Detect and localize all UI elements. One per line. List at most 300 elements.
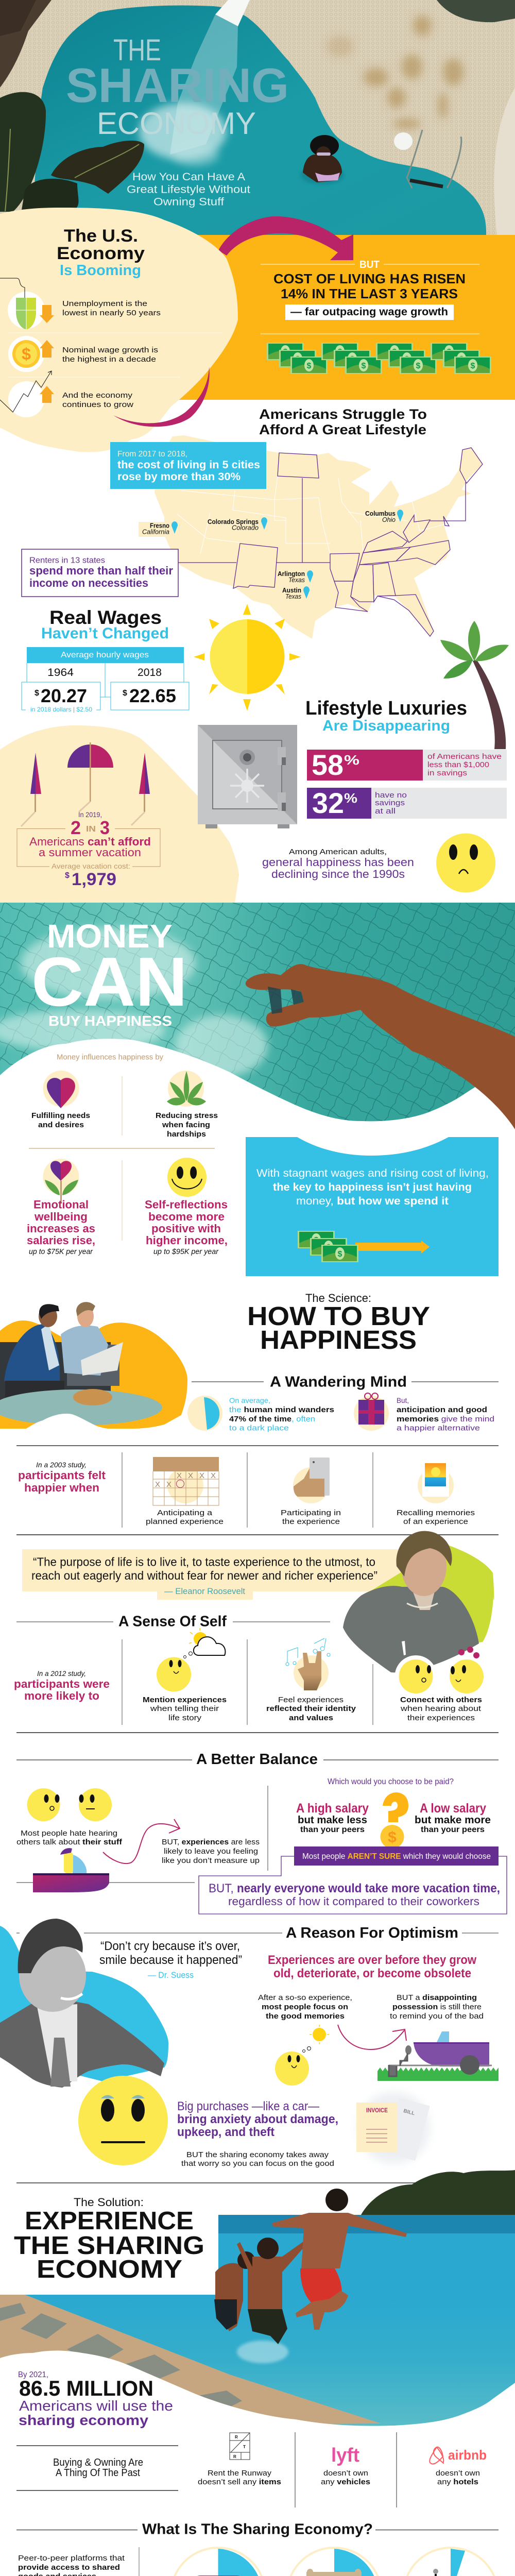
stat bar: 58 percent: %	[344, 752, 359, 768]
section: a reason for optimism: A Reason For Optimism	[286, 1925, 458, 1941]
icon: two faces	[27, 1788, 112, 1821]
icon: bed	[306, 2569, 362, 2576]
text: three traits: when telling their	[150, 1704, 219, 1713]
text: experiences: likely to leave you feeling	[164, 1847, 258, 1856]
text: three stages: Participating in	[281, 1509, 341, 1517]
foliage	[0, 92, 144, 216]
arrow	[338, 2025, 406, 2049]
photo: kids jumping in pool	[0, 2170, 515, 2432]
text: disappointing possession: BUT a disappointing	[397, 1993, 477, 2002]
callout: cost of living in 5 cities	[110, 442, 266, 489]
icon: calendar: X	[188, 1471, 193, 1480]
icon: question mark coin	[380, 1792, 408, 1849]
text: so-so experience	[258, 1993, 352, 2021]
text: so-so experience: After a so-so experience,	[258, 1993, 352, 2002]
stat bar: 32 percent: have no	[375, 791, 407, 800]
text: needs: Fulfilling needs	[31, 1111, 90, 1120]
wages table: Average hourly wages	[61, 651, 149, 659]
quote: Eleanor Roosevelt: reach out eagerly and without fear for newer and richer experience”	[31, 1569, 377, 1582]
logo: Rent the Runway: R	[235, 2435, 238, 2439]
text: three traits: reflected their identity	[266, 1704, 356, 1713]
icon: thinking face	[157, 1628, 225, 1692]
logo row: sharing companies	[198, 2432, 487, 2507]
logo: Airbnb: doesn’t own	[436, 2469, 480, 2478]
cost heading	[261, 259, 479, 334]
logo: Lyft: doesn’t own	[323, 2469, 368, 2478]
callout: aren't sure: Most people AREN’T SURE which they would choose	[302, 1852, 491, 1861]
heading: money can buy happiness	[31, 918, 187, 1029]
text: experiences: BUT, experiences are less	[162, 1838, 260, 1846]
stat: 86.5 million	[18, 2370, 173, 2428]
text: big purchases	[177, 2099, 338, 2168]
text: mind wanders: 47% of the time , often	[229, 1415, 315, 1423]
text: anticipation: anticipation and good	[397, 1405, 487, 1414]
subtitle: How You Can Have A	[132, 171, 245, 183]
icon: phone in hand	[293, 1458, 330, 1503]
heading: how to buy happiness: HOW TO BUY	[247, 1301, 430, 1331]
icon: umbrellas	[21, 742, 150, 826]
panel: the key to happiness: the key to happiness isn’t just having	[273, 1181, 472, 1193]
logo: Lyft	[321, 2445, 370, 2486]
quote: Dr. Seuss	[99, 1939, 242, 1980]
stat: 2 in 3: a summer vacation	[39, 846, 141, 859]
section: what is the sharing economy	[12, 2521, 499, 2576]
photo: pool water and hand	[0, 903, 515, 1141]
kids	[214, 2189, 407, 2363]
text: general happiness: declining since the 1990s	[271, 868, 405, 880]
text: hate hearing: Most people hate hearing	[21, 1829, 117, 1838]
text: emotional wellbeing: salaries rise,	[27, 1234, 95, 1247]
text: experiences: like you don’t measure up	[162, 1856, 260, 1865]
logo: Rent the Runway	[198, 2433, 281, 2486]
icon: smiley	[167, 1158, 207, 1197]
panel: the key to happiness: With stagnant wages and rising cost of living,	[256, 1167, 489, 1179]
heading: Americans struggle: Afford A Great Lifestyle	[259, 422, 426, 437]
icon: scooter	[431, 2569, 474, 2576]
logo: Rent the Runway: Rent the Runway	[208, 2469, 272, 2478]
text: self-reflections: higher income,	[146, 1234, 228, 1247]
callout: vacation time: regardless of how it compared to their coworkers	[228, 1895, 479, 1908]
heading: real wages: Real Wages	[49, 607, 162, 628]
text: emotional wellbeing: wellbeing	[34, 1210, 88, 1223]
text: three traits: Connect with others	[400, 1696, 482, 1704]
stat: 2 in 3	[17, 810, 160, 889]
text: anticipation	[397, 1396, 494, 1432]
section: what is the sharing economy: What Is The Sharing Economy?	[142, 2521, 373, 2538]
text: emotional wellbeing	[27, 1198, 95, 1256]
text: high salary: but make less	[298, 1815, 367, 1826]
city pins	[142, 510, 403, 600]
heading: money can buy happiness: CAN	[31, 943, 187, 1021]
wages table: 1964	[47, 667, 74, 679]
text: mind wanders: On average,	[229, 1396, 270, 1404]
text: mind wanders: to a dark place	[229, 1424, 289, 1432]
logo: Airbnb: any hotels	[437, 2478, 478, 2486]
text: big purchases: upkeep, and theft	[177, 2125, 274, 2139]
icon: two faces	[394, 1641, 488, 1698]
panel: the key to happiness: money, but how we spend it	[296, 1195, 449, 1207]
city pins: Fresno	[150, 521, 169, 530]
icon: heart	[43, 1071, 79, 1108]
panel: money influences	[27, 1053, 228, 1256]
text: three stages: Recalling memories	[397, 1509, 475, 1517]
section: a wandering mind	[187, 1374, 499, 1432]
city pins: Colorado Springs	[208, 518, 259, 526]
logo: Lyft: lyft	[331, 2445, 359, 2466]
text: self-reflections	[145, 1198, 228, 1256]
text: mind wanders: the human mind wanders	[229, 1405, 334, 1414]
stat bar: 32 percent: at all	[375, 807, 396, 816]
stat bar: 58 percent: of Americans have	[427, 752, 502, 761]
text: needs: hardships	[167, 1130, 206, 1139]
text: three traits: Mention experiences	[143, 1696, 227, 1704]
arm	[246, 964, 515, 1129]
callout: cost of living in 5 cities: the cost of living in 5 cities	[117, 459, 260, 471]
quote: Dr. Seuss: — Dr. Suess	[148, 1970, 194, 1980]
panel: 2003 study: happier when	[24, 1481, 99, 1494]
city pins: Texas	[285, 592, 301, 600]
text: disappointing possession: to remind you of the bad	[390, 2012, 484, 2021]
subtitle: Great Lifestyle Without	[127, 183, 250, 196]
panel: 2003 study	[18, 1452, 475, 1528]
icon: question mark coin: or	[392, 1802, 398, 1810]
text: self-reflections: positive with	[151, 1222, 221, 1235]
text: 2012 study: more likely to	[24, 1689, 99, 1702]
heading: how to buy happiness: The Science:	[305, 1292, 371, 1304]
text: general happiness	[262, 848, 414, 880]
text: three traits	[143, 1696, 482, 1722]
panel: money influences: Money influences happiness by	[57, 1053, 163, 1061]
text: needs: Reducing stress	[156, 1111, 218, 1120]
text: emotional wellbeing: up to $75K per year	[29, 1247, 93, 1256]
text: needs	[31, 1111, 218, 1139]
row: wage growth	[8, 336, 158, 372]
money icons	[267, 343, 491, 374]
stat: 2 in 3: 2	[71, 817, 81, 838]
text: high salary: A high salary	[296, 1801, 369, 1816]
text: disappointing possession: possession is still there	[392, 2003, 482, 2011]
heading: economy: Economy	[57, 244, 145, 263]
logo: Rent the Runway: T	[243, 2445, 246, 2449]
text: three stages: of an experience	[403, 1517, 468, 1526]
text: 2012 study	[14, 1669, 110, 1702]
heading: experience the sharing economy: EXPERIENCE	[25, 2207, 194, 2235]
callout: renters	[22, 549, 178, 597]
text: three stages: planned experience	[146, 1517, 224, 1526]
icon: palm tree	[440, 621, 509, 749]
row: wage growth: Nominal wage growth is	[62, 346, 158, 354]
hero photo: pool from above	[0, 0, 515, 235]
heading: Americans struggle: Americans Struggle To	[259, 406, 427, 422]
heading: real wages	[41, 607, 169, 642]
chart: lodging 9 percent	[287, 2548, 382, 2576]
heading: how to buy happiness	[247, 1292, 430, 1354]
text: general happiness: Among American adults,	[289, 848, 387, 856]
text: buying and owning: Buying & Owning Are	[53, 2457, 143, 2468]
text: big purchases: BUT the sharing economy takes away	[186, 2150, 329, 2159]
icon: calendar: X	[166, 1480, 171, 1489]
icon: music hand	[286, 1638, 330, 1690]
text: buying and owning	[16, 2446, 178, 2490]
city pins: Texas	[288, 576, 305, 584]
icon: calendar	[153, 1457, 219, 1505]
icon: safe	[198, 725, 297, 828]
title	[66, 33, 289, 141]
stat: 86.5 million: 86.5 MILLION	[19, 2376, 153, 2400]
logo: Airbnb	[430, 2447, 487, 2486]
quote: Eleanor Roosevelt: — Eleanor Roosevelt	[164, 1586, 245, 1596]
icon: calendar: X	[211, 1471, 216, 1480]
icon: calendar: X	[199, 1471, 204, 1480]
wages table: $	[35, 689, 39, 698]
icon: boat on trailer	[377, 2031, 499, 2081]
text: self-reflections: become more	[148, 1210, 225, 1223]
icon: gift	[354, 1393, 389, 1431]
city pins: California	[142, 528, 169, 536]
stat: 86.5 million: Americans will use the	[19, 2398, 173, 2414]
logo: Lyft: any vehicles	[321, 2478, 370, 2486]
heading: economy	[57, 226, 145, 279]
logo: Rent the Runway: doesn’t sell any items	[198, 2478, 281, 2486]
text: high salary: than your peers	[300, 1825, 365, 1834]
panel: 2003 study: In a 2003 study,	[36, 1461, 87, 1469]
text: three traits: and values	[289, 1714, 333, 1722]
photo: two men with laptop	[0, 1302, 187, 1443]
text: three stages: the experience	[282, 1517, 340, 1526]
callout: aren't sure	[294, 1846, 499, 1866]
stat: 2 in 3: $	[65, 871, 70, 880]
stat: 86.5 million: sharing economy	[19, 2412, 148, 2428]
heading: lifestyle luxuries: Are Disappearing	[322, 718, 450, 734]
callout: vacation time: BUT, nearly everyone would take more vacation time,	[209, 1882, 500, 1895]
text: self-reflections: Self-reflections	[145, 1198, 228, 1211]
text: anticipation: memories give the mind	[397, 1415, 494, 1423]
icon: pie 47 percent	[187, 1396, 222, 1431]
stat bar: 58 percent: less than $1,000	[427, 760, 489, 769]
stat: 2 in 3: 3	[100, 817, 110, 838]
wages table: 22.65	[129, 685, 176, 706]
callout: cost of living in 5 cities: rose by more than 30%	[117, 471, 241, 483]
icon: leaf	[167, 1071, 206, 1107]
subtitle: Owning Stuff	[153, 196, 224, 208]
quote: Dr. Seuss: smile because it happened”	[99, 1953, 242, 1967]
logo: Rent the Runway: R	[233, 2454, 236, 2459]
section: a sense of self: A Sense Of Self	[118, 1614, 227, 1630]
title: THE	[113, 33, 161, 67]
text: high salary	[296, 1801, 369, 1834]
text: general happiness: general happiness has been	[262, 856, 414, 869]
cost heading: BUT	[359, 259, 380, 270]
cost heading: 14% IN THE LAST 3 YEARS	[281, 286, 458, 301]
heading: real wages: Haven’t Changed	[41, 625, 169, 642]
icon: car	[191, 2575, 246, 2576]
text: anticipation: a happier alternative	[397, 1424, 480, 1432]
text: buying and owning: A Thing Of The Past	[56, 2467, 140, 2479]
stat: 2 in 3: In 2019,	[78, 810, 102, 819]
heading: economy: Is Booming	[60, 262, 141, 279]
icon: invoice and bill: BILL	[403, 2108, 415, 2116]
text: emotional wellbeing: Emotional	[33, 1198, 89, 1211]
wages table: $	[123, 689, 127, 698]
text: experiences over: Experiences are over before they grow	[268, 1953, 476, 1967]
section: a better balance	[16, 1751, 507, 1914]
city pins: Arlington	[278, 570, 305, 578]
text: needs: and desires	[38, 1121, 84, 1129]
text: anticipation: But,	[397, 1396, 409, 1404]
text: three stages	[146, 1509, 475, 1526]
city pins: Austin	[282, 586, 301, 594]
icon: invoice and bill	[356, 2092, 430, 2164]
text: emotional wellbeing: increases as	[27, 1222, 95, 1235]
text: 2012 study: In a 2012 study,	[37, 1669, 86, 1677]
icon: sun	[194, 604, 301, 711]
icon: flower	[43, 1159, 79, 1204]
text: so-so experience: the good memories	[266, 2012, 345, 2021]
city pins: Columbus	[365, 510, 396, 517]
quote: Eleanor Roosevelt	[22, 1549, 402, 1600]
stat: 2 in 3: IN	[86, 825, 96, 834]
heading: experience the sharing economy	[14, 2196, 204, 2283]
text: disappointing possession	[390, 1993, 484, 2021]
text: three traits: life story	[168, 1714, 202, 1722]
stat bar: 32 percent	[307, 787, 507, 819]
section: a better balance: A Better Balance	[196, 1751, 318, 1768]
heading: how to buy happiness: HAPPINESS	[260, 1325, 417, 1354]
text: self-reflections: up to $95K per year	[153, 1247, 219, 1256]
callout: renters: income on necessities	[29, 577, 148, 589]
panel: salary choice	[199, 1777, 507, 1914]
arrow	[103, 1819, 180, 1863]
quote: Eleanor Roosevelt: “The purpose of life is to live it, to taste experience to the utmost, to	[33, 1555, 375, 1568]
heading: Americans struggle	[259, 406, 427, 437]
text: mind wanders	[229, 1396, 334, 1432]
row: unemployment	[0, 278, 161, 329]
icon: sad face	[436, 834, 495, 892]
panel: salary choice: Which would you choose to be paid?	[328, 1777, 454, 1786]
text: experiences	[162, 1838, 260, 1865]
stat: 2 in 3: 1,979	[72, 870, 116, 889]
stat: 2 in 3: Average vacation cost:	[52, 862, 130, 870]
pool ladder	[407, 130, 461, 188]
US map	[139, 435, 483, 639]
logo: Airbnb: airbnb	[448, 2447, 487, 2463]
text: definition: Peer-to-peer platforms that	[18, 2554, 125, 2563]
wages table: 20.27	[41, 685, 87, 706]
section: a reason for optimism	[16, 1925, 499, 2168]
text: low salary: than your peers	[421, 1825, 485, 1834]
cost heading: COST OF LIVING HAS RISEN	[273, 271, 466, 286]
stat bar: 58 percent: 58	[312, 749, 344, 781]
stat bar: 32 percent: 32	[312, 787, 344, 819]
text: needs: when facing	[162, 1121, 210, 1129]
text: experiences over: old, deteriorate, or become obsolete	[273, 1967, 471, 1980]
heading: money can buy happiness: MONEY	[47, 918, 173, 955]
heading: experience the sharing economy: ECONOMY	[37, 2256, 182, 2283]
panel: economy booming blob	[0, 208, 238, 452]
woman in pool	[301, 135, 344, 184]
row: growing economy: And the economy	[62, 391, 133, 400]
row: unemployment: lowest in nearly 50 years	[62, 309, 161, 317]
stat bar: 32 percent: savings	[375, 799, 405, 807]
icon: invoice and bill: INVOICE	[366, 2108, 388, 2114]
icon: photo memory	[418, 1461, 454, 1503]
icon: question mark coin: $	[388, 1829, 397, 1846]
subtitle	[127, 171, 250, 208]
row: unemployment: Unemployment is the	[62, 299, 147, 308]
callout: vacation time	[199, 1856, 507, 1914]
city pins: Colorado	[232, 523, 259, 532]
title: SHARING	[66, 58, 289, 112]
stat bar: 58 percent: in savings	[427, 769, 467, 777]
text: 2012 study: participants were	[14, 1677, 110, 1690]
text: hate hearing: others talk about their stuff	[16, 1838, 123, 1846]
heading: lifestyle luxuries	[305, 698, 467, 734]
magenta arrow	[218, 216, 353, 260]
photo: Eleanor Roosevelt	[343, 1531, 494, 1672]
quote: Dr. Seuss: “Don’t cry because it’s over,	[100, 1939, 240, 1953]
stat bar: 58 percent	[307, 749, 507, 781]
wages table	[22, 647, 189, 713]
section: a wandering mind: A Wandering Mind	[270, 1374, 407, 1390]
row: wage growth: $	[22, 345, 31, 363]
stat bar: 32 percent: %	[344, 790, 357, 806]
heading: experience the sharing economy: The Solution:	[74, 2196, 144, 2209]
row: wage growth: the highest in a decade	[62, 355, 156, 364]
callout: renters: Renters in 13 states	[29, 556, 105, 565]
panel: summer vacation blob	[0, 725, 239, 903]
row: growing economy	[0, 371, 133, 417]
wages table: in 2018 dollars | $2.50	[30, 706, 92, 713]
heading: money can buy happiness: BUY HAPPINESS	[48, 1013, 172, 1029]
highlighted states	[178, 448, 483, 636]
text: so-so experience: most people focus on	[262, 2003, 348, 2011]
text: big purchases: Big purchases —like a car—	[177, 2099, 319, 2113]
icon: calendar: X	[177, 1471, 182, 1480]
text: three stages: Anticipating a	[157, 1509, 213, 1517]
wages table: 2018	[138, 667, 162, 679]
panel: 2003 study: participants felt	[18, 1469, 106, 1482]
title: ECONOMY	[97, 106, 256, 141]
heading: economy: The U.S.	[64, 226, 138, 246]
heading: experience the sharing economy: THE SHARING	[14, 2232, 204, 2260]
icon: neutral face	[78, 2076, 168, 2165]
chart: other services 5 percent	[403, 2548, 498, 2576]
text: low salary	[415, 1801, 491, 1834]
heading: lifestyle luxuries: Lifestyle Luxuries	[305, 698, 467, 719]
panel: the key to happiness	[246, 1137, 499, 1276]
text: three traits: when hearing about	[400, 1704, 482, 1713]
text: big purchases: bring anxiety about damage,	[177, 2112, 338, 2126]
callout: renters: spend more than half their	[29, 564, 173, 577]
icon: money with arrow	[298, 1231, 430, 1262]
text: three traits: their experiences	[407, 1714, 475, 1722]
text: experiences over	[268, 1953, 476, 1980]
photo: Dr. Seuss	[0, 1919, 168, 2088]
callout: cost of living in 5 cities: From 2017 to 2018,	[117, 450, 187, 459]
text: definition: provide access to shared	[18, 2563, 120, 2572]
city pins: Ohio	[382, 516, 396, 523]
icon: boat	[16, 1848, 195, 1892]
cost heading: — far outpacing wage growth	[290, 306, 448, 318]
icon: thinking smiley	[275, 2025, 329, 2086]
text: low salary: A low salary	[420, 1801, 486, 1816]
stat: 86.5 million: By 2021,	[18, 2370, 48, 2379]
section: a sense of self	[14, 1614, 488, 1725]
text: low salary: but make more	[415, 1815, 491, 1826]
chart: vehicle-for-hire 21 percent	[171, 2548, 266, 2576]
text: hate hearing	[16, 1829, 123, 1846]
text: definition	[18, 2554, 125, 2576]
